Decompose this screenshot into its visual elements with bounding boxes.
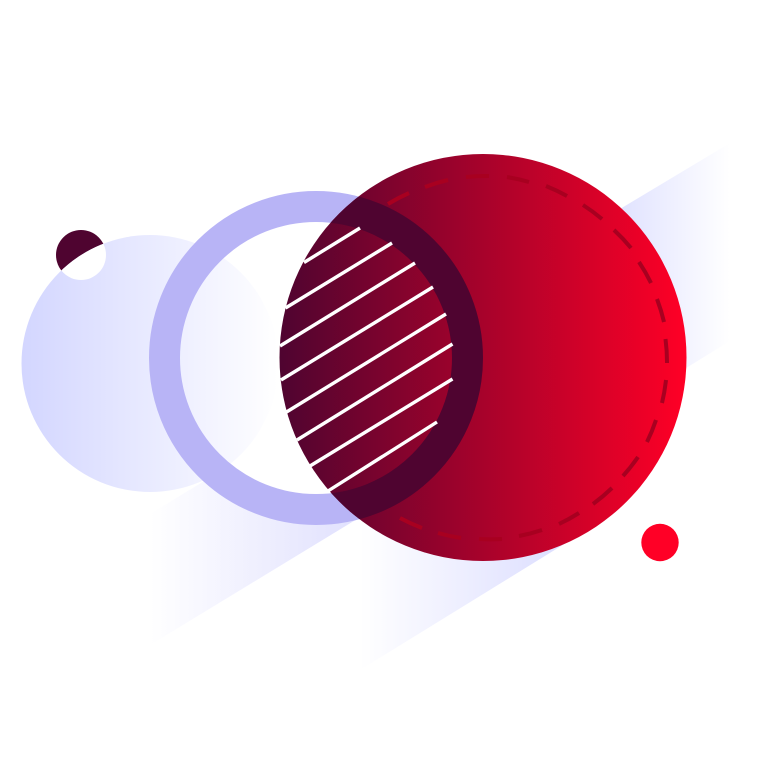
dashed arc	[388, 176, 667, 539]
large red gradient circle	[280, 154, 686, 561]
light lavender circle	[22, 235, 278, 492]
lavender ring	[164, 206, 468, 510]
small circle overlap in white	[62, 244, 106, 280]
small dark circle	[56, 230, 106, 280]
diagonal white hatch lines	[280, 228, 452, 491]
ring hole white backing	[176, 218, 456, 498]
shadow band: lower right	[360, 260, 600, 670]
ring overlap segment	[330, 196, 483, 520]
small red dot	[641, 524, 679, 561]
shadow band: upper right	[600, 143, 730, 421]
shadow band: left	[150, 385, 362, 645]
